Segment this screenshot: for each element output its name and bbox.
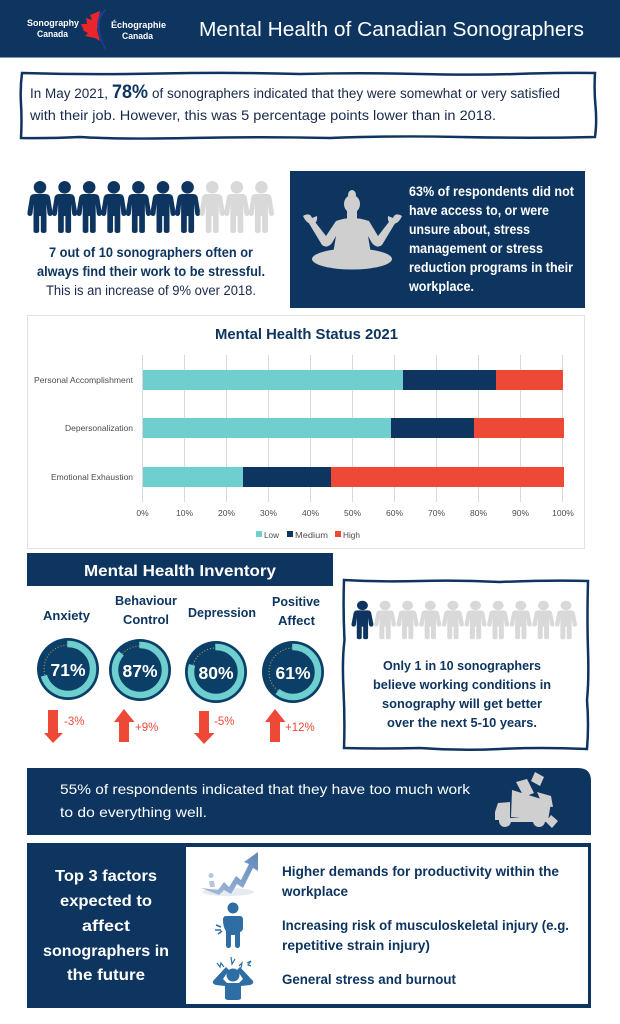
logo: Sonography Canada: Canada [37,29,69,40]
panel: stacked bar chart [28,316,584,548]
banner: too much work [27,768,591,835]
metric: Depression: 80% [198,663,234,683]
callout: job satisfaction [21,73,596,139]
callout: working conditions [343,580,588,750]
header banner [0,0,620,58]
text: 63% respondents: workplace. [408,279,474,294]
text: factor list [281,864,569,987]
heading: top 3 factors: expected to [60,893,152,910]
icon: meditating figure [303,190,402,270]
legend: Medium [295,530,328,540]
text: 63% respondents: management or stress [409,241,543,256]
metric: Positive Affect: Positive [272,595,320,609]
metric: Depression: Depression [188,606,256,620]
heading: top 3 factors: the future [67,967,145,984]
text: stress statistic: This is an increase of 9% over 2018. [46,283,256,298]
axis labels [136,508,574,518]
text: 63% respondents: have access to, or were [409,203,549,218]
text: only 1 in 10: over the next 5-10 years. [387,715,537,730]
metric: Anxiety: Anxiety [43,609,90,623]
metric: Behaviour Control [109,594,177,742]
arrow: up +12%: +12% [285,722,315,734]
pictogram: 1 in 10 [352,601,577,639]
metric: Behaviour Control: Behaviour [115,594,177,608]
text: only 1 in 10: Only 1 in 10 sonographers [383,658,541,673]
axis labels: 70% [428,508,445,518]
panel: top 3 factors [27,843,591,1008]
icon: rising arrow [201,852,258,896]
heading: top 3 factors: affect [82,918,130,935]
text: 63% respondents [408,184,574,294]
axis labels: 30% [260,508,277,518]
axis labels: 0% [136,508,149,518]
legend [256,530,360,540]
text: factor list: General stress and burnout [282,972,456,987]
bar: Personal Accomplishment [34,370,563,390]
icon: injured person [215,902,243,948]
axis labels: 40% [302,508,319,518]
heading: top 3 factors [43,868,169,984]
metric: Behaviour Control: Control [123,613,169,627]
arrow: up +9%: +9% [135,722,158,734]
text: factor list: workplace [281,884,348,899]
metric: Anxiety [37,609,99,743]
banner: too much work: to do everything well. [60,804,207,820]
text: only 1 in 10: believe working conditions in [373,677,551,692]
callout: job satisfaction: with their job. However, this was 5 percentage points lower than in 2018. [29,108,496,123]
metric: Positive Affect: 61% [275,663,311,683]
metric: Anxiety: 71% [50,660,86,680]
logo: Sonography Canada: Échographie [111,20,166,31]
arrow: down -3%: -3% [64,716,84,728]
metric: Behaviour Control: 87% [122,661,158,681]
callout: job satisfaction: In May 2021, [30,86,108,101]
axis labels: 50% [344,508,361,518]
legend: Low [264,530,280,540]
arrow: up +12% [265,709,315,742]
axis labels: 20% [218,508,235,518]
icon: stressed person [213,957,253,1000]
text: factor list: Increasing risk of musculoskeletal injury (e.g. [282,918,569,933]
heading: Mental Health Inventory: Mental Health Inventory [84,563,276,580]
arrow: up +9% [114,709,158,742]
legend: High [343,530,360,540]
logo: Sonography Canada: Canada [122,31,154,42]
metric: Positive Affect: Affect [278,614,316,628]
metric: Depression [185,606,256,744]
chart title: Mental Health Status 2021 [215,326,398,343]
text: 63% respondents: unsure about, stress [409,222,530,237]
axis labels: 80% [470,508,487,518]
axis labels: 90% [512,508,529,518]
text: 63% respondents: 63% of respondents did not [409,184,574,199]
text: only 1 in 10: sonography will get better [382,696,542,711]
axis labels: 100% [552,508,574,518]
metric: Positive Affect [262,595,324,742]
bar: Emotional Exhaustion [51,467,564,487]
heading: Mental Health Inventory [27,553,333,586]
callout: job satisfaction: 78% [112,81,148,103]
heading: top 3 factors: sonographers in [43,943,169,960]
axis labels: 10% [176,508,193,518]
bar: Emotional Exhaustion: Emotional Exhaustion [51,472,133,482]
bar: Depersonalization: Depersonalization [65,423,133,433]
text: stress statistic [37,245,265,298]
icon: overloaded truck [495,772,558,828]
arrow: down -5%: -5% [214,716,234,728]
text: stress statistic: always find their work to be stressful. [37,264,265,279]
panel: stress programs [290,171,585,308]
text: 63% respondents: reduction programs in their [409,260,574,275]
text: only 1 in 10 [373,658,551,730]
text: factor list: repetitive strain injury) [282,938,430,953]
bar: Depersonalization [65,418,564,438]
text: factor list: Higher demands for productivity within the [282,864,559,879]
callout: job satisfaction: of sonographers indicated that they were somewhat or very satisfied [152,86,560,101]
title: Mental Health of Canadian Sonographers [199,19,584,41]
axis labels: 60% [386,508,403,518]
logo: Sonography Canada: Sonography [27,18,80,29]
heading: top 3 factors: Top 3 factors [55,868,157,885]
bar: Personal Accomplishment: Personal Accomplishment [34,375,134,385]
banner: too much work: 55% of respondents indicated that they have too much work [60,781,471,797]
logo: Sonography Canada [27,9,166,50]
pictogram: 7 out of 10 stressed [27,181,274,233]
text: stress statistic: 7 out of 10 sonographers often or [49,245,254,260]
